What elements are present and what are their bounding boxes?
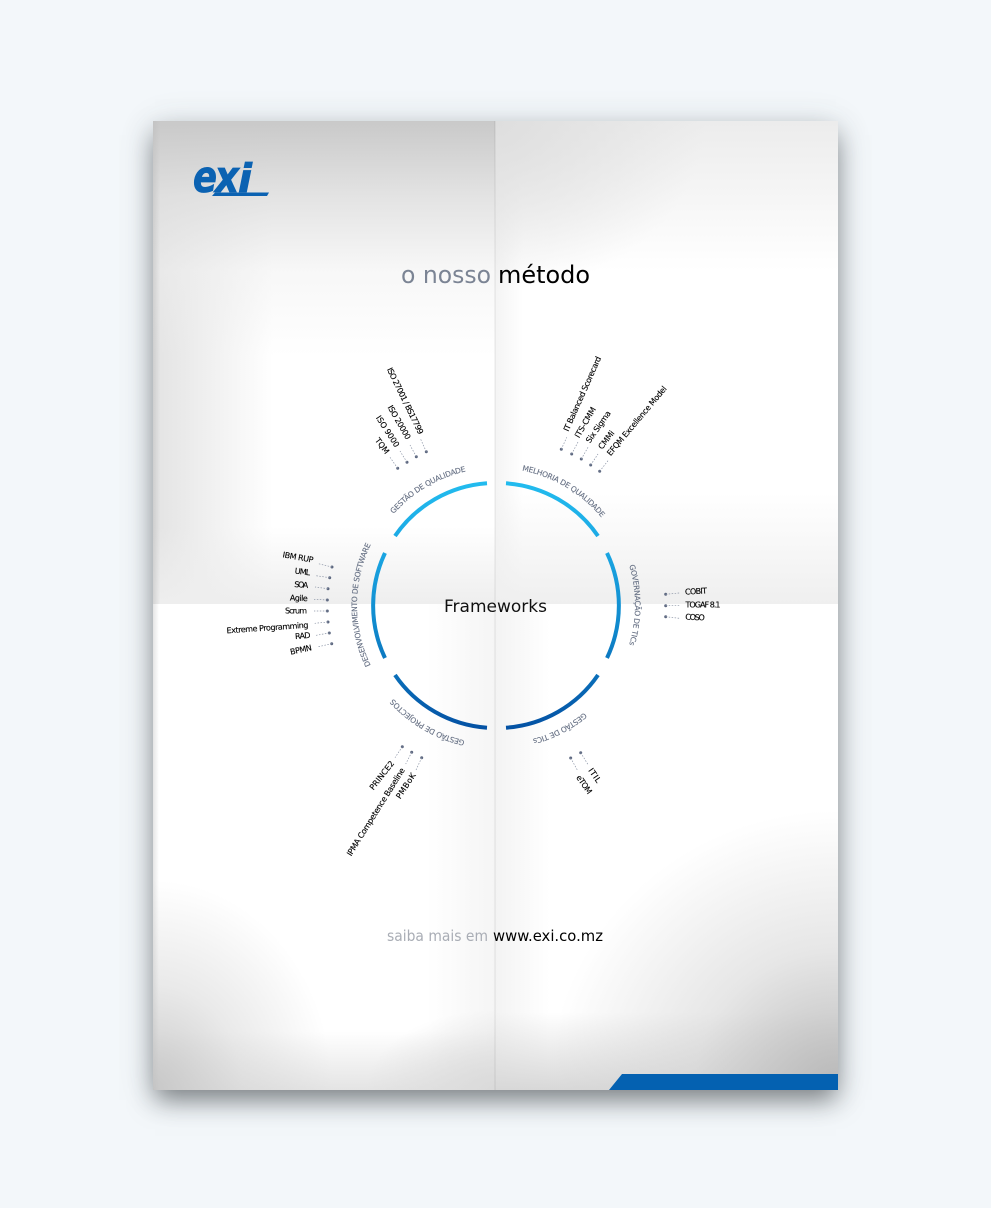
list: Gestão de Qualidade frameworks: ISO 20000	[386, 404, 412, 441]
list: Desenvolvimento de Software frameworks: BPMN	[289, 643, 313, 657]
arc label: Gestão de Projectos: GESTÃO DE PROJECTOS	[390, 700, 464, 746]
arc label: Melhoria de Qualidade: MELHORIA DE QUALIDADE	[522, 465, 606, 518]
list: Gestão de Qualidade frameworks	[372, 366, 428, 470]
title: método	[498, 261, 590, 289]
footer link text: saiba mais em	[387, 927, 488, 945]
panel: bottom-right quadrant	[495, 604, 838, 1090]
panel: poster sheet	[153, 121, 838, 1090]
title: o nosso	[401, 261, 491, 289]
arc label: Gestão de TICs: GESTÃO DE TICs	[533, 714, 586, 743]
list: Gestão de Qualidade frameworks: ISO 9000	[374, 414, 401, 449]
list: Melhoria de Qualidade frameworks	[560, 355, 669, 473]
list: Gestão de TICs frameworks	[569, 751, 603, 796]
corner band	[609, 1074, 838, 1090]
arc label: Governação de TICs: GOVERNAÇÃO DE TICs	[630, 564, 642, 646]
list: Gestão de Qualidade frameworks: ISO 27001 / BS17799	[385, 366, 425, 436]
list: Desenvolvimento de Software frameworks: Scrum	[285, 606, 307, 616]
list: Desenvolvimento de Software frameworks: Extreme Programming	[226, 621, 309, 635]
list: Desenvolvimento de Software frameworks: UML	[294, 567, 311, 577]
list: Gestão de Projectos frameworks	[345, 745, 423, 858]
list: Gestão de Qualidade frameworks: TQM	[372, 435, 391, 456]
title	[401, 261, 590, 289]
panel: bottom-left quadrant	[153, 604, 495, 1090]
list: Desenvolvimento de Software frameworks: IBM RUP	[282, 550, 314, 565]
arc label: Desenvolvimento de Software: DESENVOLVIMENTO DE SOFTWARE	[351, 542, 371, 667]
list: Desenvolvimento de Software frameworks: SOA	[294, 580, 309, 590]
list: Gestão de Projectos frameworks: IPMA Competence Baseline	[345, 766, 407, 858]
list: Melhoria de Qualidade frameworks: Six Sigma	[584, 409, 613, 445]
list: Governação de TICs frameworks: COSO	[685, 612, 705, 623]
panel: top-right quadrant	[495, 121, 838, 604]
ring: six framework arcs	[373, 483, 619, 728]
list: Gestão de Projectos frameworks: PRINCE2	[368, 759, 396, 792]
list: Gestão de Projectos frameworks: PMBoK	[394, 771, 418, 801]
center label: Frameworks: Frameworks	[444, 597, 547, 617]
list: Desenvolvimento de Software frameworks	[226, 550, 334, 657]
panel: top-left quadrant	[153, 121, 495, 604]
list: Melhoria de Qualidade frameworks: EFQM Excellence Model	[605, 384, 669, 458]
logo: exi: i	[238, 157, 253, 202]
footer link text	[387, 927, 603, 945]
list: Desenvolvimento de Software frameworks: RAD	[295, 631, 311, 641]
list: Melhoria de Qualidade frameworks: ITS-CMM	[573, 405, 598, 439]
list: Governação de TICs frameworks: COBIT	[685, 586, 707, 597]
logo: exi: x	[213, 152, 240, 203]
list: Gestão de TICs frameworks: ITIL	[586, 766, 603, 785]
list: Governação de TICs frameworks	[664, 586, 720, 623]
list: Melhoria de Qualidade frameworks: CMMi	[596, 429, 617, 451]
list: Desenvolvimento de Software frameworks: Agile	[290, 593, 308, 603]
logo: exi	[193, 152, 269, 203]
list: Governação de TICs frameworks: TOGAF 8.1	[684, 600, 720, 610]
arc label: Gestão de Qualidade: GESTÃO DE QUALIDADE	[390, 466, 466, 513]
logo: exi: e	[193, 152, 217, 203]
list: Melhoria de Qualidade frameworks: IT Balanced Scorecard	[562, 355, 603, 433]
list: Gestão de TICs frameworks: eTOM	[574, 774, 594, 796]
footer link text: www.exi.co.mz	[493, 927, 603, 945]
